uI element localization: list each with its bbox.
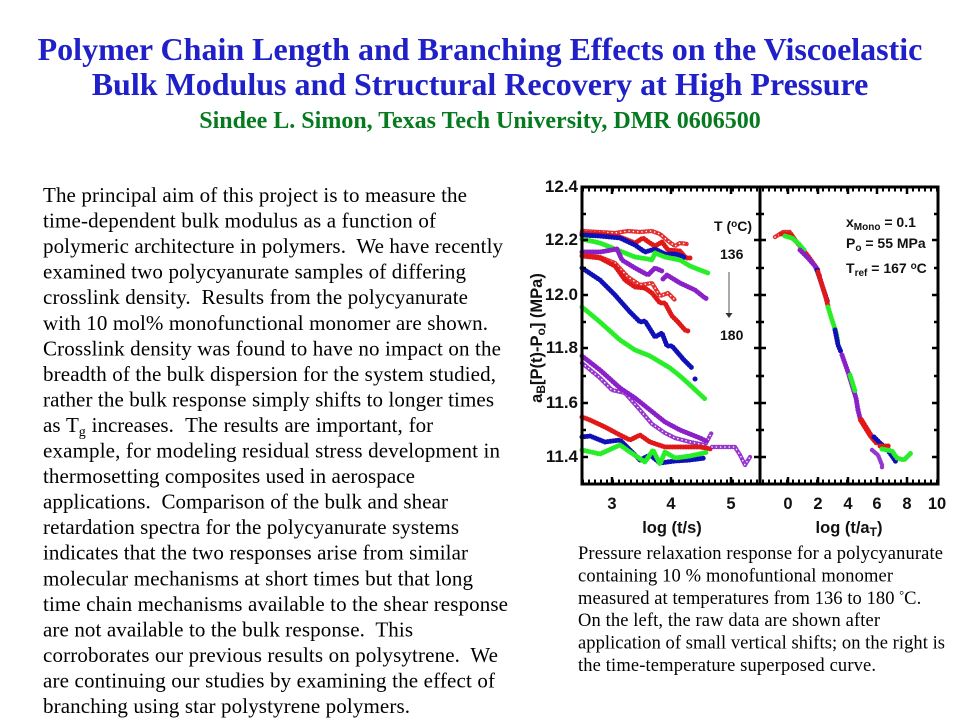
parameter annotations: o [855, 243, 861, 254]
body text block: time chain mechanisms available to the shear response [43, 592, 508, 616]
body text block: indicates that the two responses arise from similar [43, 541, 468, 565]
body text block: Crosslink density was found to have no impact on the [43, 336, 501, 360]
temperature legend: o [731, 219, 737, 230]
left x axis tick labels: 4 [666, 495, 676, 513]
author line: Sindee L. Simon, Texas Tech University, DMR 0606500 [199, 108, 761, 134]
y axis tick labels: 11.4 [546, 447, 579, 466]
figure caption [578, 544, 945, 676]
parameter annotations: P [846, 235, 855, 251]
right x axis title: log (t/a [816, 519, 870, 537]
body text block: The principal aim of this project is to measure the [43, 183, 467, 207]
temperature legend [714, 218, 752, 343]
y axis title: B [534, 385, 548, 394]
body text block: applications. Comparison of the bulk and shear [43, 490, 448, 514]
figure caption: containing 10 % monofuntional monomer [578, 566, 893, 586]
right x axis tick labels: 0 [783, 495, 793, 513]
body text block: as T [43, 413, 79, 437]
left x axis tick labels: 3 [607, 495, 617, 513]
body text block: with 10 mol% monofunctional monomer are shown. [43, 311, 488, 335]
y axis title: ] (MPa) [528, 273, 546, 328]
parameter annotations: ref [855, 268, 868, 279]
parameter annotations: = 167 [867, 260, 911, 276]
figure caption: On the left, the raw data are shown after [578, 611, 880, 631]
figure caption: the time-temperature superposed curve. [578, 656, 876, 676]
y axis tick labels [545, 177, 579, 466]
body text block [43, 183, 508, 718]
parameter annotations [846, 214, 927, 279]
body text block: increases. The results are important, for [86, 413, 433, 437]
temperature legend: 180 [720, 327, 744, 343]
body text block: crosslink density. Results from the polycyanurate [43, 285, 468, 309]
parameter annotations: Mono [854, 222, 880, 233]
right x axis tick labels: 4 [843, 495, 853, 513]
body text block: are not available to the bulk response. This [43, 617, 413, 641]
right x axis title: T [870, 525, 878, 539]
y axis tick labels: 11.6 [546, 393, 578, 412]
body text block: molecular mechanisms at short times but that long [43, 566, 474, 590]
body text block: breadth of the bulk dispersion for the system studied, [43, 362, 496, 386]
body text block: corroborates our previous results on polysytrene. We [43, 643, 498, 667]
parameter annotations: = 55 MPa [861, 235, 926, 251]
parameter annotations: C [917, 260, 927, 276]
body text block: polymeric architecture in polymers. We have recently [43, 234, 504, 258]
right x axis tick labels: 10 [928, 495, 946, 513]
figure caption: C. [904, 589, 921, 609]
title: Polymer Chain Length and Branching Effects on the Viscoelastic [38, 30, 922, 66]
parameter annotations: o [911, 261, 917, 272]
y axis tick labels: 12.2 [545, 230, 578, 249]
figure caption: Pressure relaxation response for a polycyanurate [578, 544, 943, 564]
right panel master curve [775, 232, 912, 468]
temperature legend: 136 [720, 246, 744, 262]
body text block: thermosetting composites used in aerospace [43, 464, 415, 488]
right x axis tick labels: 2 [813, 495, 823, 513]
left x axis tick labels: 5 [726, 495, 736, 513]
body text block: example, for modeling residual stress development in [43, 438, 500, 462]
figure caption: ° [899, 588, 904, 602]
figure caption: application of small vertical shifts; on the right is [578, 634, 945, 654]
figure caption: measured at temperatures from 136 to 180 [578, 589, 895, 609]
temperature legend: T ( [714, 218, 731, 234]
left x axis title: log (t/s) [642, 519, 702, 537]
parameter annotations: T [846, 260, 855, 276]
body text block: g [79, 425, 86, 440]
y axis tick labels: 12.4 [545, 177, 579, 196]
y axis title: o [534, 328, 548, 336]
body text block: branching using star polystyrene polymers. [43, 694, 410, 718]
parameter annotations: x [846, 214, 854, 230]
parameter annotations: = 0.1 [880, 214, 916, 230]
title: Bulk Modulus and Structural Recovery at High Pressure [92, 66, 868, 102]
y axis tick labels: 12.0 [545, 285, 578, 304]
body text block: retardation spectra for the polycyanurate systems [43, 515, 459, 539]
y axis title: [P(t)-P [528, 336, 546, 385]
left x axis tick labels [607, 495, 736, 513]
body text block: are continuing our studies by examining the effect of [43, 668, 495, 692]
arrow: temperature increasing [726, 272, 732, 318]
left panel raw data curves [582, 231, 750, 465]
right x axis tick labels [783, 495, 946, 513]
right x axis tick labels: 8 [902, 495, 912, 513]
body text block: examined two polycyanurate samples of differing [43, 260, 466, 284]
right x axis tick labels: 6 [872, 495, 882, 513]
body text block: time-dependent bulk modulus as a function of [43, 208, 436, 232]
y axis tick labels: 11.8 [546, 338, 578, 357]
title [38, 30, 922, 134]
plot frame and ticks [582, 187, 938, 484]
temperature legend: C) [737, 218, 752, 234]
right x axis title: ) [877, 519, 882, 537]
body text block: rather the bulk response simply shifts to longer times [43, 387, 494, 411]
y axis title: a [528, 394, 546, 403]
